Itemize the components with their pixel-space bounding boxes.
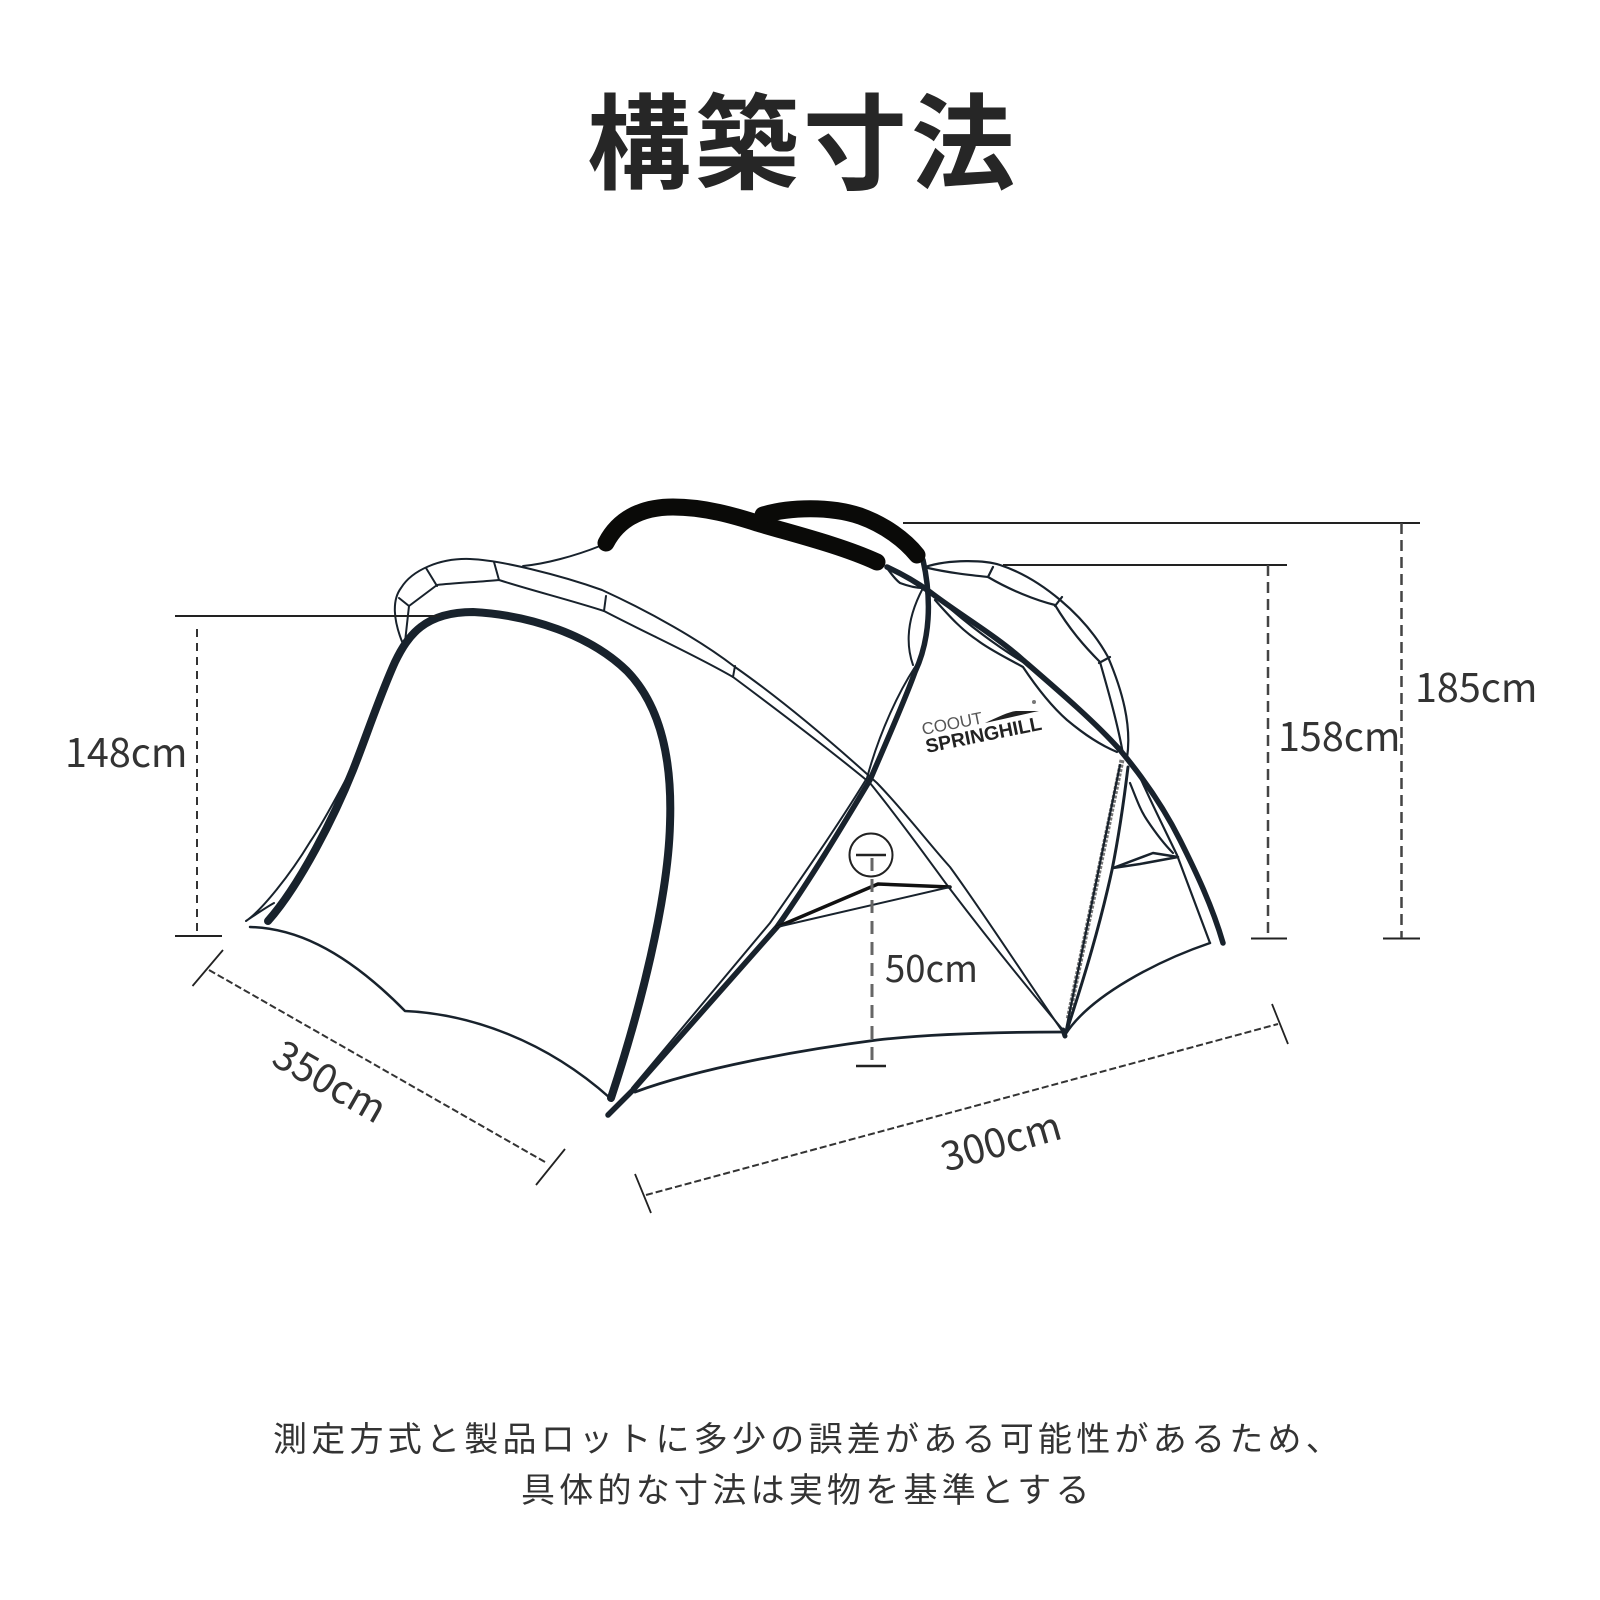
rear top band xyxy=(887,561,1128,758)
rear right pole xyxy=(887,567,1223,943)
dimension: 148cm: 148cm xyxy=(65,722,188,779)
tent diagram xyxy=(246,507,1223,1115)
logo xyxy=(920,700,1044,758)
black top pole two xyxy=(763,509,917,555)
dimension: 158cm: 158cm xyxy=(1278,706,1400,763)
rear vent xyxy=(1113,853,1178,868)
dimension: 185cm: 185cm xyxy=(1415,657,1538,714)
footnote xyxy=(273,1421,1344,1510)
logo roof mark xyxy=(985,711,1039,723)
dimension: 300cm: 300cm xyxy=(934,1095,1067,1183)
dimension: 158cm xyxy=(1003,565,1400,938)
front door arch xyxy=(268,612,670,1098)
pole foot at middle ground xyxy=(1063,1030,1065,1036)
middle vent xyxy=(777,884,950,927)
middle cross pole xyxy=(608,560,928,1115)
title: 構築寸法 xyxy=(587,88,1019,204)
left ground edge xyxy=(250,927,610,1098)
dimension: 350cm xyxy=(192,950,565,1185)
middle ground edge xyxy=(635,1032,1064,1092)
footnote line 2: 具体的な寸法は実物を基準とする xyxy=(521,1472,1094,1510)
logo word COOUT: COOUT xyxy=(920,709,984,739)
dimension: 350cm: 350cm xyxy=(264,1025,398,1135)
logo word SPRINGHILL: SPRINGHILL xyxy=(924,713,1044,758)
dimension: 185cm xyxy=(903,523,1538,938)
left thin guy lines xyxy=(246,772,350,921)
dimension: 50cm xyxy=(850,834,978,1066)
black top pole one xyxy=(606,507,877,562)
dimension: 148cm xyxy=(65,616,440,936)
top-left roof band xyxy=(395,546,1065,1035)
rear door lines xyxy=(1065,760,1210,1035)
footnote line 1: 測定方式と製品ロットに多少の誤差がある可能性があるため、 xyxy=(273,1421,1344,1459)
logo registered mark xyxy=(1032,700,1036,704)
dimension: 50cm: 50cm xyxy=(885,940,978,993)
middle cross pole thin line xyxy=(632,588,923,1088)
dimension: 300cm xyxy=(635,1004,1288,1213)
